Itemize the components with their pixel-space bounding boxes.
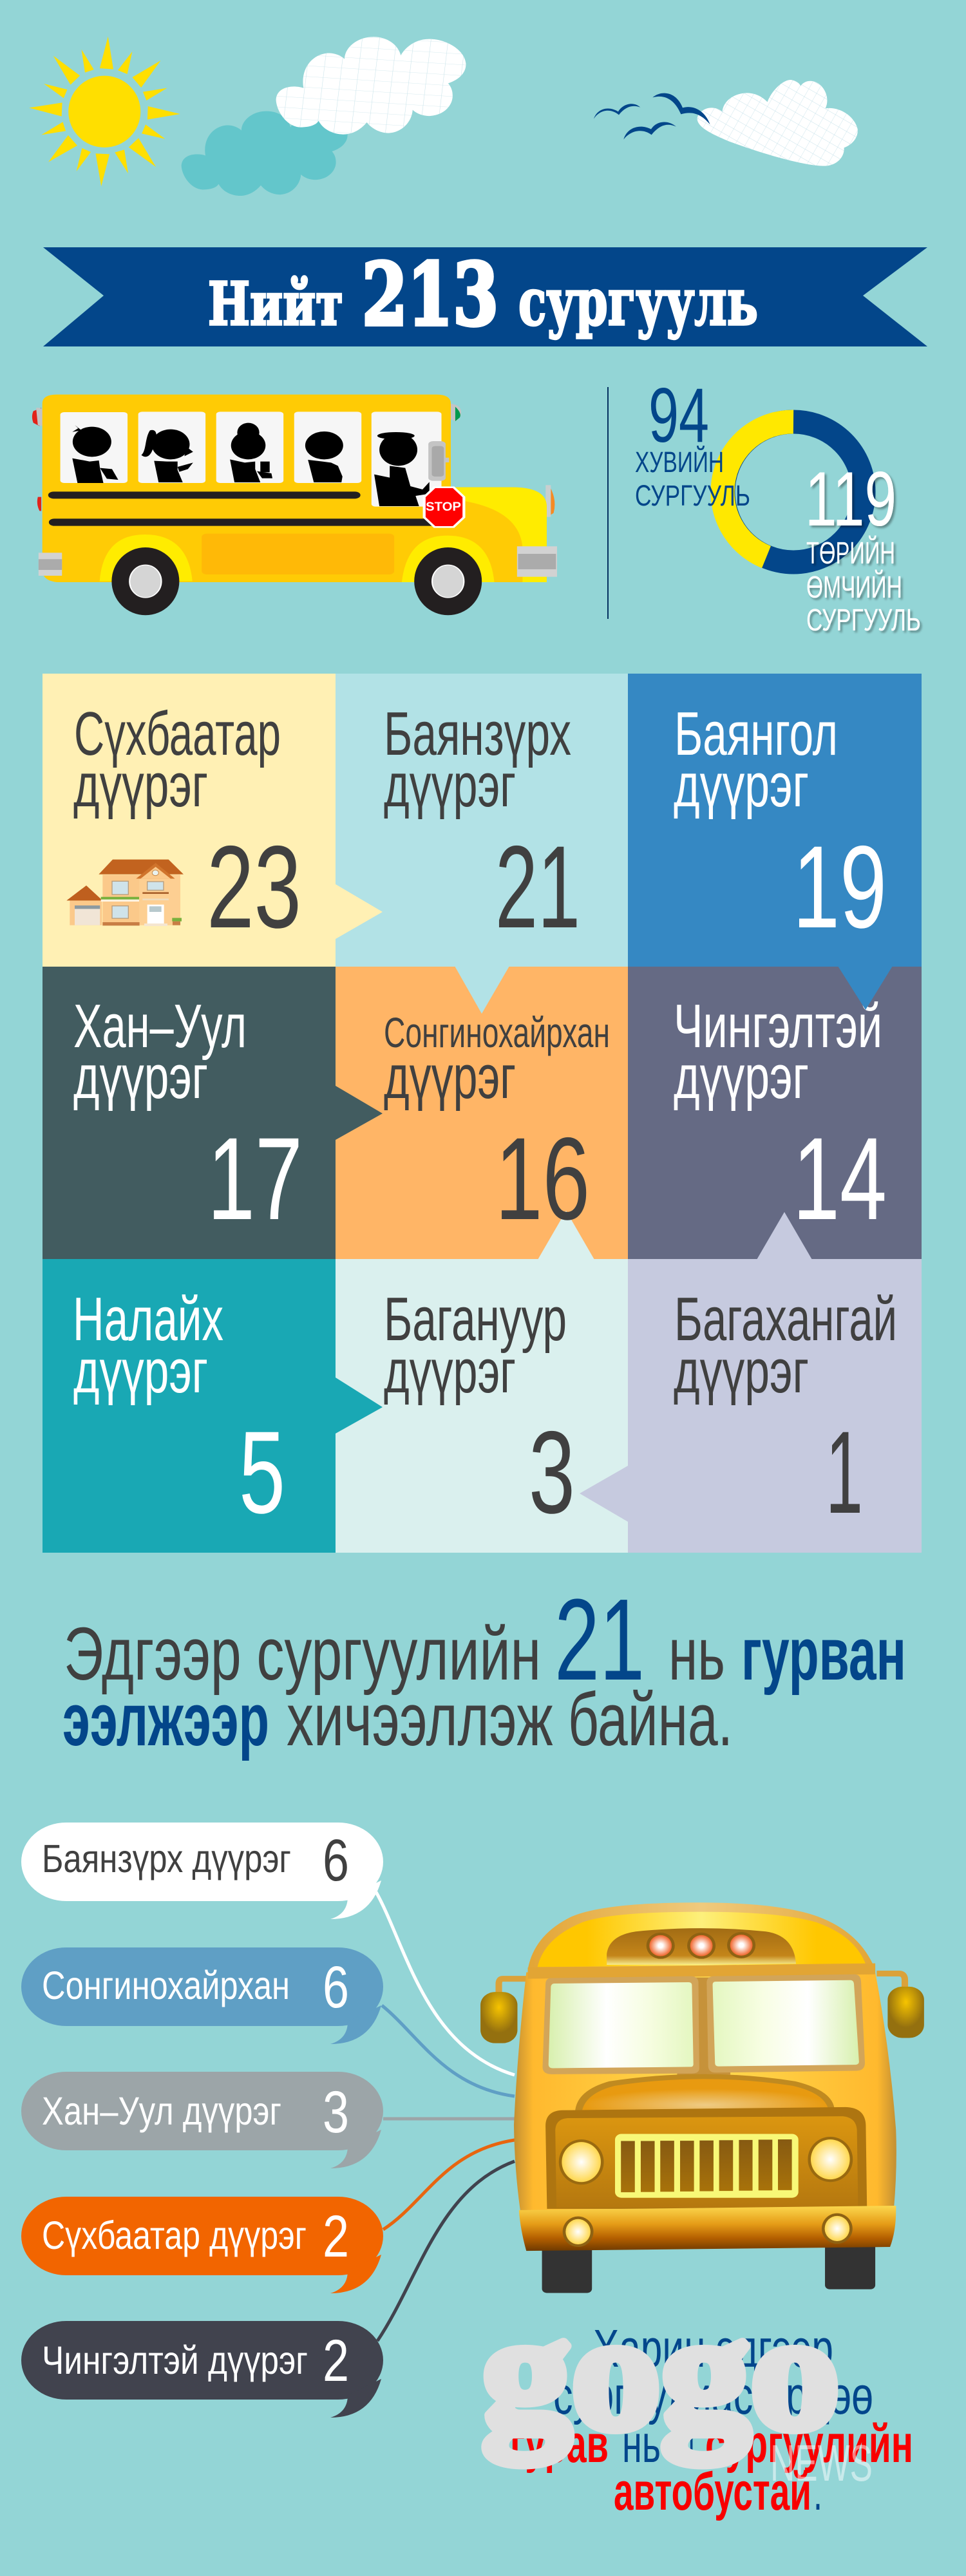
icon: birds: [594, 93, 710, 140]
stat: 94 private schools: ХУВИЙН: [635, 446, 724, 478]
panel: Сүхбаатар district: 23: [207, 821, 301, 952]
panel: Сүхбаатар district: дүүрэг: [73, 751, 208, 820]
icon: school bus front view: [480, 1902, 924, 2293]
icon: school bus side view: STOP: [426, 500, 461, 514]
panel: Налайх district: Налайх: [73, 1285, 223, 1354]
panel arrows: [336, 884, 893, 1522]
bubble: Баянзүрх: Баянзүрх дүүрэг: [42, 1837, 291, 1880]
bubble: Сонгинохайрхан: Сонгинохайрхан: [42, 1964, 290, 2007]
watermark: gogo news: gogo: [482, 2280, 840, 2467]
panel: Чингэлтэй district: дүүрэг: [674, 1043, 809, 1112]
bubble: Чингэлтэй: 2: [323, 2328, 349, 2394]
banner: total schools: [43, 245, 927, 346]
stat: 119 state schools: ӨМЧИЙН: [806, 569, 902, 605]
panel: Багахангай district: дүүрэг: [674, 1337, 809, 1406]
bubble: Сонгинохайрхан: [21, 1947, 383, 2044]
stat: 94 private schools: [635, 372, 750, 512]
panel: Хан-Уул district: Хан–Уул: [73, 992, 247, 1061]
panel: Баянзүрх district: Баянзүрх: [384, 699, 571, 768]
text: headline about three-shift schools: [62, 1575, 906, 1761]
passenger silhouettes: [72, 423, 430, 506]
panel: Баянгол district: [628, 674, 922, 967]
panel: Сүхбаатар district: [43, 674, 336, 967]
banner: total schools: Нийт: [208, 269, 343, 339]
stat: 119 state schools: 119: [805, 456, 896, 542]
panel: Баянгол district: Баянгол: [674, 699, 838, 768]
bubble: Сонгинохайрхан: 6: [323, 1955, 349, 2020]
text: bottom note about school buses: [510, 2318, 913, 2521]
stat: 119 state schools: ТӨРИЙН: [806, 535, 895, 571]
panel: Налайх district: [43, 1259, 336, 1553]
panel: Налайх district: 5: [239, 1406, 285, 1538]
text: headline about three-shift schools: 21: [554, 1575, 645, 1705]
bubble: Чингэлтэй: Чингэлтэй дүүрэг: [42, 2338, 308, 2382]
panel: Баянзүрх district: дүүрэг: [384, 751, 516, 820]
bubble: Хан-Уул: 3: [323, 2079, 349, 2145]
panel: Хан-Уул district: [43, 967, 336, 1259]
panel: Хан-Уул district: 17: [207, 1113, 303, 1244]
stat: 119 state schools: СУРГУУЛЬ: [806, 603, 921, 638]
text: bottom note about school buses: .: [813, 2461, 822, 2521]
panel: Багануур district: Багануур: [384, 1285, 567, 1354]
text: headline about three-shift schools: нь: [668, 1612, 725, 1696]
panel: Чингэлтэй district: 14: [793, 1113, 887, 1244]
panel: Багануур district: 3: [529, 1406, 575, 1538]
panel: Сонгинохайрхан district: дүүрэг: [384, 1043, 516, 1112]
icon: house: [66, 860, 184, 926]
panel: Багануур district: дүүрэг: [384, 1337, 516, 1406]
text: bottom note about school buses: гурав: [510, 2414, 609, 2474]
panel: Багахангай district: 1: [826, 1406, 863, 1538]
panel: Налайх district: дүүрэг: [73, 1337, 208, 1406]
panel: Баянгол district: дүүрэг: [674, 751, 809, 820]
bubble: Сүхбаатар: 2: [323, 2204, 349, 2269]
panel: Багахангай district: [628, 1259, 922, 1553]
icon: school bus side view: [32, 395, 557, 615]
icon: white grid cloud: [276, 37, 466, 135]
bubble: Сүхбаатар: [21, 2197, 383, 2293]
icon: sun: [29, 37, 180, 186]
number: Сонгинохайрхан 16: 16: [495, 1113, 590, 1244]
bubble: Сүхбаатар: Сүхбаатар дүүрэг: [42, 2213, 307, 2257]
banner: total schools: сургууль: [518, 264, 758, 340]
panel: Баянзүрх district: 21: [495, 821, 580, 952]
panel: Сүхбаатар district: Сүхбаатар: [74, 699, 281, 768]
stat: 94 private schools: 94: [649, 372, 709, 459]
bubble: Баянзүрх: [21, 1823, 383, 1919]
divider: [607, 387, 609, 619]
panel: Баянзүрх district: [336, 674, 628, 967]
text: bottom note about school buses: 1: [684, 2414, 698, 2474]
bubble: Баянзүрх: 6: [323, 1828, 349, 1893]
icon: right grid cloud: [697, 80, 858, 166]
banner: total schools: 213: [362, 245, 498, 345]
text: headline about three-shift schools: ээлжээр: [62, 1678, 269, 1761]
text: bottom note about school buses: Харин эдгээр: [593, 2318, 833, 2378]
panel: Чингэлтэй district: [628, 967, 922, 1259]
stat: 119 state schools: [805, 456, 921, 638]
donut chart: private vs state schools: [723, 422, 864, 562]
text: headline about three-shift schools: хичээллэж байна.: [287, 1678, 733, 1761]
panel: Баянгол district: 19: [793, 821, 887, 952]
panel: Чингэлтэй district: Чингэлтэй: [674, 992, 882, 1061]
text: headline about three-shift schools: Эдгээр сургуулийн: [64, 1612, 541, 1696]
panel: Багануур district: [336, 1259, 628, 1553]
text: bottom note about school buses: нь: [622, 2414, 661, 2474]
bubble: Чингэлтэй: [21, 2321, 383, 2418]
stat: 94 private schools: СУРГУУЛЬ: [635, 479, 750, 512]
icon: teal cloud: [182, 111, 348, 196]
text: bottom note about school buses: автобустай: [614, 2461, 811, 2521]
panel: Сонгинохайрхан district: [336, 967, 628, 1259]
panel: Сонгинохайрхан district: Сонгинохайрхан: [384, 1009, 610, 1056]
watermark: gogo news: NEWS: [770, 2434, 873, 2492]
panel: Хан-Уул district: дүүрэг: [73, 1043, 208, 1112]
bubble: Хан-Уул: [21, 2072, 383, 2168]
bubble: Хан-Уул: Хан–Уул дүүрэг: [42, 2089, 281, 2133]
connector lines: [376, 1892, 515, 2341]
